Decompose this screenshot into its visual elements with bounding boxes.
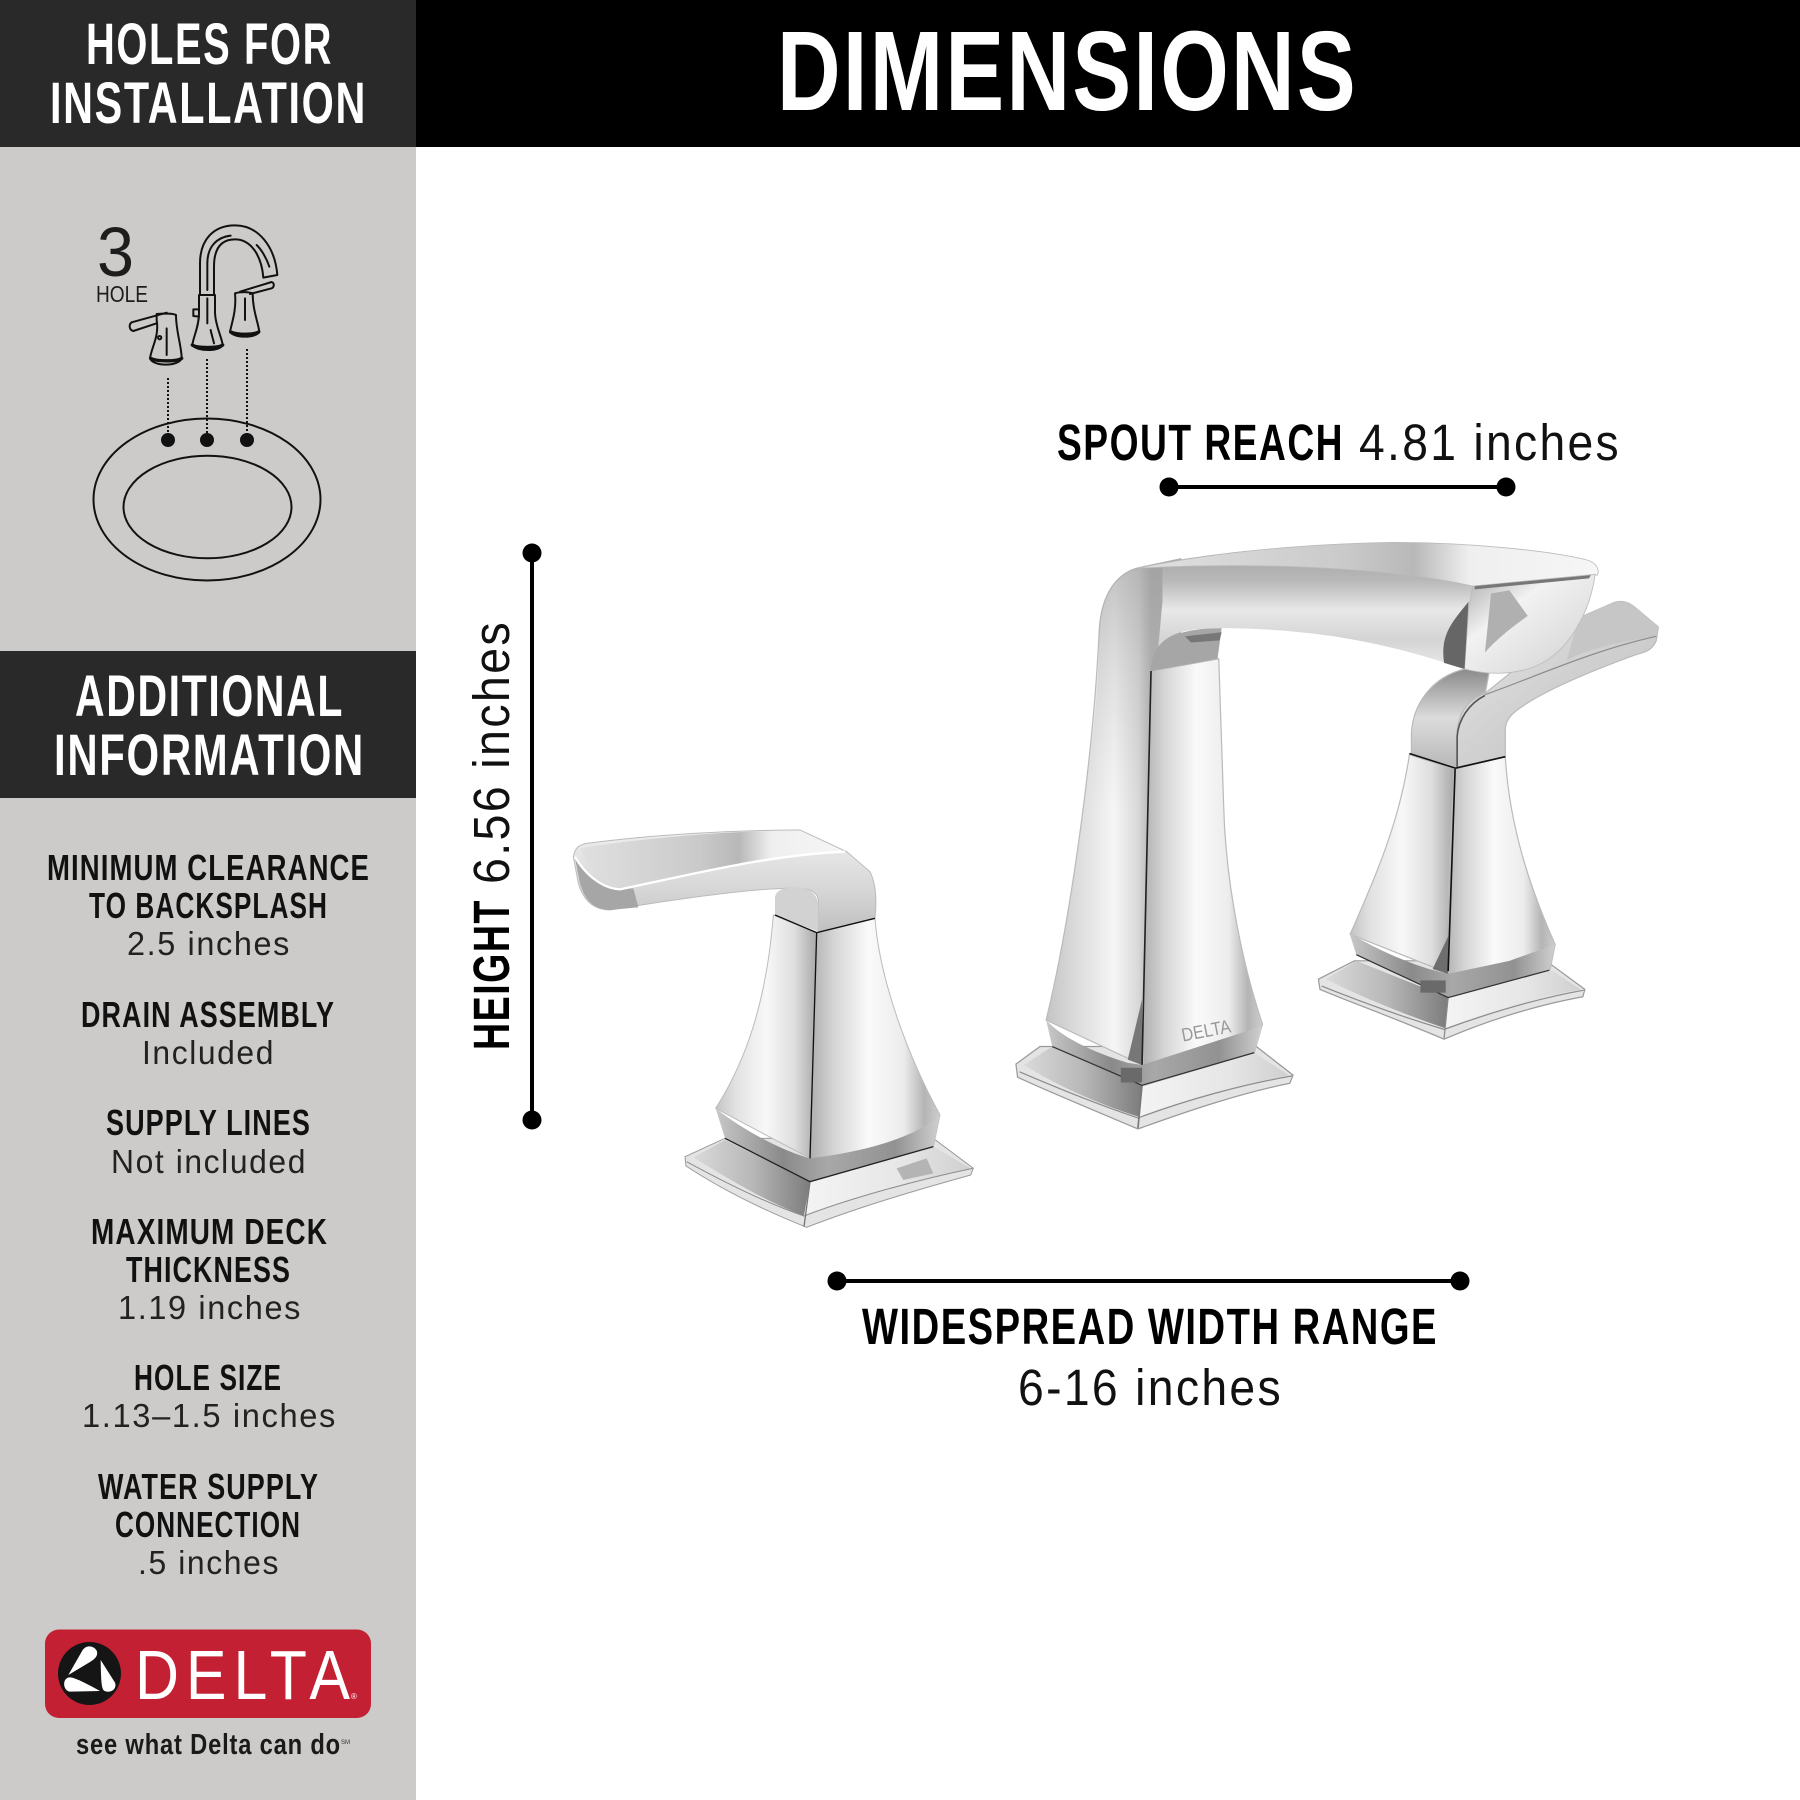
spec: maximum deck thickness: THICKNESS bbox=[126, 1249, 291, 1290]
dimension: height: HEIGHT bbox=[463, 899, 520, 1050]
spec: maximum deck thickness: MAXIMUM DECK bbox=[91, 1211, 328, 1252]
spec: minimum clearance bbox=[47, 847, 370, 962]
spec: minimum clearance: TO BACKSPLASH bbox=[89, 885, 328, 926]
header: additional information: ADDITIONAL bbox=[75, 664, 344, 729]
faucet: left handle bbox=[573, 830, 973, 1227]
panel: sidebar bbox=[0, 0, 416, 1800]
spec: water supply connection: CONNECTION bbox=[115, 1504, 301, 1545]
logo: delta: ® bbox=[351, 1692, 357, 1701]
dimension: widespread width range: WIDESPREAD WIDTH RANGE bbox=[862, 1298, 1438, 1355]
spec: supply lines bbox=[106, 1102, 311, 1180]
spec: supply lines: Not included bbox=[111, 1143, 307, 1180]
dimension: spout reach: 4.81 inches bbox=[1359, 414, 1621, 471]
spec: drain assembly: Included bbox=[142, 1034, 275, 1071]
spec: hole size: HOLE SIZE bbox=[134, 1357, 282, 1398]
title: dimensions bbox=[416, 0, 1800, 147]
faucet: center spout bbox=[1016, 542, 1598, 1129]
spec: maximum deck thickness: 1.19 inches bbox=[118, 1289, 302, 1326]
icon: three hole installation diagram: 3 bbox=[97, 213, 134, 291]
header: additional information: INFORMATION bbox=[54, 723, 365, 788]
spec: drain assembly bbox=[81, 994, 335, 1071]
spec: minimum clearance: MINIMUM CLEARANCE bbox=[47, 847, 370, 888]
dimension: widespread width range bbox=[828, 1272, 1470, 1416]
dimension: widespread width range: 6-16 inches bbox=[1018, 1359, 1283, 1416]
header: holes for installation bbox=[0, 0, 416, 147]
spec: drain assembly: DRAIN ASSEMBLY bbox=[81, 994, 335, 1035]
header: holes for installation: HOLES FOR bbox=[86, 12, 333, 77]
spec: water supply connection: .5 inches bbox=[138, 1544, 280, 1581]
dimension: height bbox=[463, 544, 542, 1130]
header: additional information bbox=[0, 651, 416, 798]
icon: three hole installation diagram bbox=[94, 213, 320, 580]
spec: water supply connection bbox=[98, 1466, 319, 1581]
logo: delta: see what Delta can do bbox=[76, 1729, 341, 1761]
dimension: spout reach: SPOUT REACH bbox=[1057, 414, 1344, 471]
spec: supply lines: SUPPLY LINES bbox=[106, 1102, 311, 1143]
dimension: spout reach bbox=[1057, 414, 1621, 496]
header: holes for installation: INSTALLATION bbox=[50, 71, 367, 136]
icon: three hole installation diagram: HOLE bbox=[96, 281, 148, 307]
logo: delta: SM bbox=[341, 1740, 350, 1746]
spec: hole size: 1.13–1.5 inches bbox=[82, 1397, 337, 1434]
dimension: height: 6.56 inches bbox=[463, 620, 520, 884]
spec: hole size bbox=[82, 1357, 337, 1434]
logo: delta bbox=[45, 1630, 371, 1761]
faucet: center spout: DELTA bbox=[1180, 1015, 1233, 1046]
spec: minimum clearance: 2.5 inches bbox=[127, 925, 291, 962]
spec: water supply connection: WATER SUPPLY bbox=[98, 1466, 319, 1507]
faucet: right handle bbox=[1318, 601, 1658, 1039]
logo: delta: DELTA bbox=[135, 1636, 357, 1714]
spec: maximum deck thickness bbox=[91, 1211, 328, 1326]
title: dimensions: DIMENSIONS bbox=[777, 8, 1358, 134]
